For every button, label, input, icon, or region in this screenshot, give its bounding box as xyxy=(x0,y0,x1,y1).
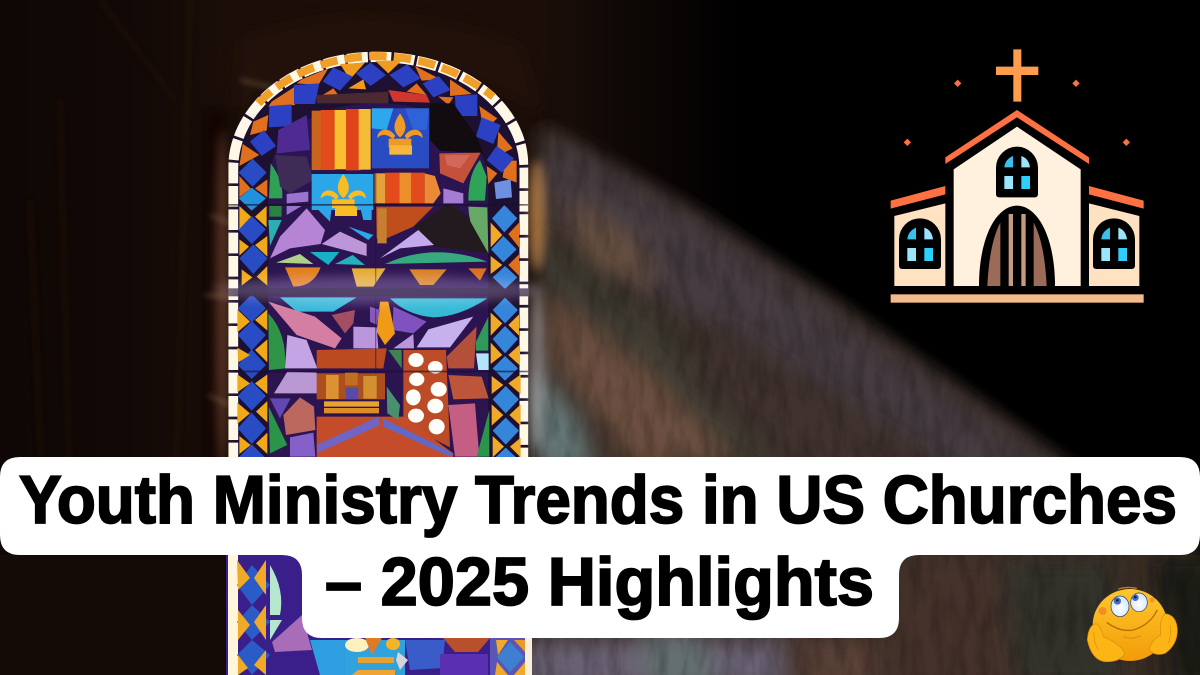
lower figure shapes xyxy=(268,302,489,447)
title line 2: – 2025 Highlights xyxy=(325,544,874,620)
lower window section xyxy=(226,555,532,675)
side wings xyxy=(891,186,1144,286)
masonry xyxy=(317,373,385,413)
icon: cross xyxy=(996,49,1038,102)
right border triangles xyxy=(491,223,521,457)
window: left xyxy=(899,218,941,269)
icon: thinking smiley emoji xyxy=(1087,587,1177,662)
border frame of white glass xyxy=(228,52,528,457)
eyes xyxy=(1111,593,1147,617)
arch band pieces xyxy=(239,61,517,183)
white dots xyxy=(406,353,447,434)
door xyxy=(979,206,1055,286)
right border diamonds xyxy=(491,205,519,474)
teal and green lens strip xyxy=(276,252,487,265)
field base xyxy=(268,104,488,457)
upper heraldic stripes xyxy=(312,109,371,170)
orange half shapes xyxy=(285,267,487,287)
middle stripes xyxy=(375,173,441,243)
main roof xyxy=(945,110,1089,164)
middle blue fleur panel xyxy=(312,174,373,240)
window: right xyxy=(1093,218,1135,269)
base xyxy=(891,294,1144,303)
facade xyxy=(954,127,1081,286)
left border triangles xyxy=(237,206,267,454)
window: top xyxy=(996,147,1038,197)
lower teal lenses xyxy=(280,297,487,317)
light beam from window xyxy=(528,122,1200,675)
title panel xyxy=(0,457,1200,638)
hands xyxy=(1087,614,1177,662)
upper blue fleur panel xyxy=(372,108,429,168)
sparkles xyxy=(904,80,1130,146)
icon: church xyxy=(891,49,1144,303)
left border diamonds xyxy=(238,159,268,474)
stained glass window xyxy=(228,52,528,457)
window glow overlays xyxy=(205,80,546,470)
lead bars xyxy=(228,173,528,373)
